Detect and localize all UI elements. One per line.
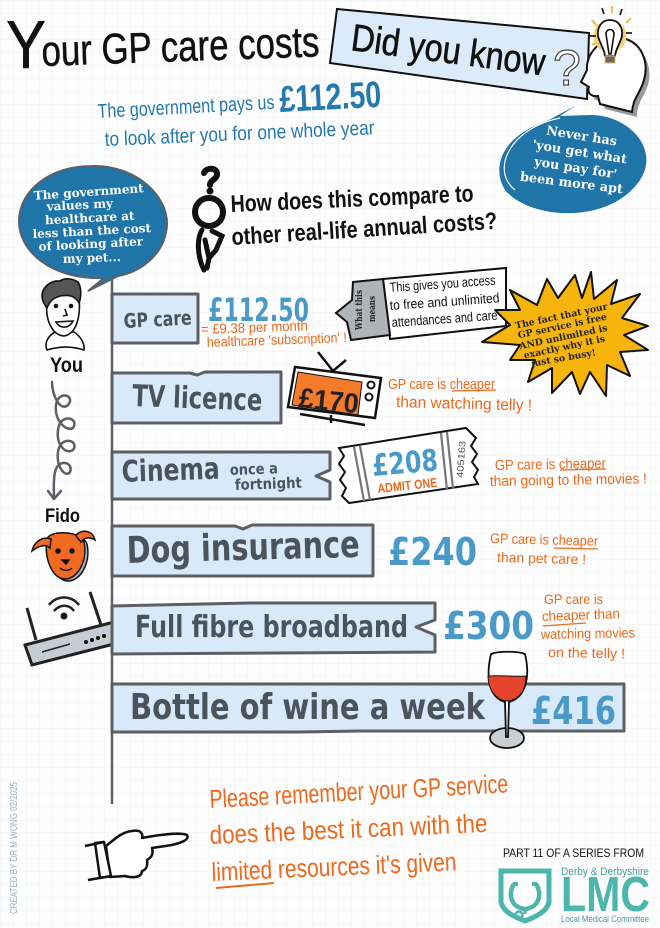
question mark: ? — [553, 40, 581, 96]
speech bubble: government values: less than the cost — [32, 221, 152, 241]
note: cheaper than telly: than watching telly ! — [396, 394, 532, 415]
panel: what this means — [336, 268, 506, 340]
question: how does this compare: How does this compare to — [230, 180, 474, 218]
bar: bottle of wine: Bottle of wine a week — [130, 687, 486, 728]
speech bubble: government values — [19, 166, 167, 291]
access text: attendances and care — [391, 308, 498, 330]
icon: person with question mark — [195, 169, 223, 270]
panel: what this means: means — [368, 296, 378, 322]
bar: cinema — [112, 452, 330, 499]
question: how does this compare — [230, 180, 498, 251]
price: GP care £112.50: £112.50 — [208, 291, 309, 329]
speech bubble: government values: values my — [45, 196, 114, 214]
note: cheaper than pet care: GP care is cheaper — [490, 530, 599, 549]
note: cheaper than movies on telly: watching movies — [540, 624, 635, 642]
callout: starburst: AND unlimited is — [517, 323, 608, 352]
icon: wine glass — [488, 652, 527, 748]
icon: cinema ticket — [339, 428, 478, 503]
title: Y — [6, 7, 46, 83]
logo: Derby and Derbyshire LMC: Local Medical Committee — [561, 914, 649, 924]
callout: starburst: exactly why it is — [523, 334, 606, 362]
speech bubble: government values: The government — [33, 181, 145, 203]
closing message — [209, 768, 509, 888]
bar: GP care: GP care — [123, 305, 192, 333]
icon: cinema ticket: £208 — [371, 443, 439, 484]
icon: television — [288, 352, 381, 425]
note: cheaper than pet care: than pet care ! — [497, 549, 586, 567]
icon: television: £170 — [297, 382, 360, 419]
bar: cinema: fortnight — [235, 474, 302, 494]
bar: TV licence: TV licence — [132, 379, 263, 419]
note: cheaper than telly: GP care is cheaper — [388, 377, 495, 393]
icon: cinema ticket: 405163 — [455, 441, 469, 478]
note: cheaper than telly — [388, 377, 532, 415]
note: cheaper than movies on telly — [540, 591, 635, 661]
price: wine £416: £416 — [531, 689, 616, 733]
access text: This gives you access — [389, 273, 496, 295]
callout: starburst — [482, 272, 648, 396]
callout: starburst: GP service is free — [517, 312, 608, 341]
bar: cinema: once a — [230, 459, 278, 479]
note: cheaper than movies — [490, 456, 647, 490]
panel: did you know banner — [330, 9, 589, 99]
speech bubble: never has: been more apt — [519, 170, 624, 197]
bar: full fibre broadband — [112, 603, 435, 654]
text block: government pays: The government pays us — [97, 92, 275, 123]
speech bubble: never has: you pay for' — [532, 154, 618, 182]
closing message: Please remember your GP service — [209, 768, 509, 814]
bar: full fibre broadband: Full fibre broadband — [135, 610, 408, 645]
icon: wifi router — [25, 592, 118, 665]
note: per month: healthcare 'subscription' ! — [207, 329, 347, 350]
bar: dog insurance: Dog insurance — [126, 523, 360, 572]
price: broadband £300: £300 — [443, 604, 534, 648]
icon: head with light bulb — [581, 6, 649, 117]
icon: pointing hand — [85, 831, 188, 880]
speech bubble: never has — [499, 106, 646, 213]
speech bubble: never has: 'you get what — [531, 138, 628, 167]
text block: government pays — [97, 74, 382, 151]
bar: TV licence — [112, 372, 281, 423]
speech bubble: government values: healthcare at — [45, 209, 135, 227]
logo: Derby and Derbyshire LMC — [501, 866, 650, 924]
timeline axis — [111, 278, 113, 804]
icon: you face — [42, 279, 84, 350]
question: how does this compare: other real-life annual costs? — [231, 208, 498, 251]
note: cheaper than movies on telly: cheaper than — [542, 605, 620, 624]
icon: cinema ticket: ADMIT ONE — [377, 475, 438, 496]
title: our GP care costs — [41, 18, 320, 76]
title — [6, 7, 320, 83]
speech bubble: government values: my pet... — [63, 250, 121, 266]
icon: dog — [32, 531, 95, 581]
label: you: You — [50, 354, 83, 377]
speech bubble: never has: Never has — [545, 124, 618, 150]
callout: starburst: The fact that your — [514, 301, 609, 332]
arrow: squiggle — [48, 382, 74, 499]
access text: to free and unlimited — [389, 290, 500, 313]
credit: created by: CREATED BY DR M WONG 02/2025 — [8, 782, 20, 914]
label: fido: Fido — [45, 506, 80, 527]
note: cheaper than movies on telly: GP care is — [544, 591, 603, 607]
note: per month — [201, 317, 347, 350]
logo: Derby and Derbyshire LMC: Derby & Derbyshire — [561, 866, 649, 878]
amount £112.50: £112.50 — [278, 74, 382, 120]
price: dog insurance £240: £240 — [388, 530, 477, 574]
note: per month: = £9.38 per month — [201, 317, 308, 337]
panel: what this means: What this — [355, 290, 365, 331]
speech bubble: government values: of looking after — [38, 234, 144, 254]
closing message: does the best it can with the — [209, 808, 488, 850]
text block: government pays: to look after you for one whole year — [104, 117, 375, 151]
did you know text: Did you know — [349, 17, 548, 84]
note: cheaper than movies: than going to the movies ! — [490, 471, 647, 490]
note: cheaper than movies on telly: on the telly ! — [548, 644, 625, 661]
note: cheaper than movies: GP care is cheaper — [495, 456, 606, 474]
callout: starburst: just so busy! — [529, 347, 597, 370]
access text — [389, 273, 500, 330]
closing message: limited resources it's given — [211, 846, 457, 887]
note: cheaper than pet care — [490, 530, 599, 567]
bar: cinema: Cinema — [121, 452, 220, 490]
bar: GP care — [112, 294, 198, 343]
